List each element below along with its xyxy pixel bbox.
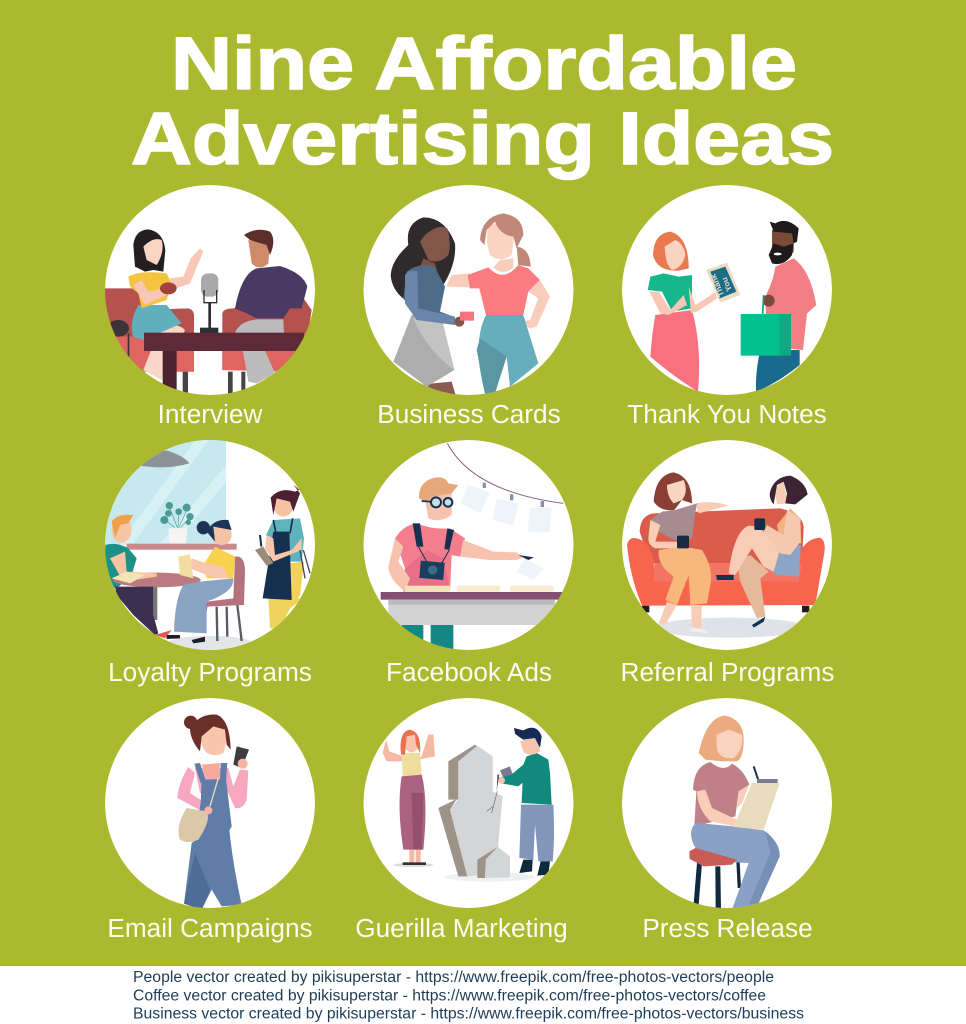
illustration: customer receiving a note and bag [622, 185, 832, 395]
panel: referral programs [621, 440, 834, 687]
credits text: Business vector created by pikisuperstar - https://www.freepik.com/free-photos-vectors/business [133, 1006, 804, 1022]
illustration: cafe with waitress [103, 438, 315, 651]
title: Advertising Ideas [131, 97, 834, 180]
label: Thank You Notes [627, 399, 827, 429]
label: Guerilla Marketing [355, 913, 568, 943]
label: Loyalty Programs [108, 657, 312, 687]
panel: interview [103, 185, 315, 429]
panel: thank you notes [622, 185, 832, 429]
label: Press Release [642, 913, 813, 943]
label: Interview [158, 399, 262, 429]
illustration: customer receiving a note and bag: Thank [708, 272, 726, 298]
credits text [133, 969, 804, 1022]
illustration: sculptor and rock [364, 698, 574, 908]
panel: facebook ads [364, 440, 574, 687]
label: Email Campaigns [107, 913, 313, 943]
label: Business Cards [377, 399, 561, 429]
panel: guerilla marketing [355, 698, 574, 943]
illustration: woman reading her phone [105, 698, 315, 910]
panel: loyalty programs [103, 438, 315, 687]
title: Nine Affordable [171, 22, 797, 105]
panel: press release [622, 698, 832, 943]
illustration: two friends on a sofa [622, 440, 832, 650]
illustration: interview at a table [103, 185, 315, 395]
label: Facebook Ads [386, 657, 552, 687]
illustration: two women exchanging a card [364, 185, 574, 397]
title [131, 22, 834, 180]
illustration: woman writing on a stool [622, 698, 832, 910]
credits text: Coffee vector created by pikisuperstar - https://www.freepik.com/free-photos-vectors/coffee [133, 988, 766, 1004]
illustration: customer receiving a note and bag: You [720, 276, 734, 293]
panel: email campaigns [105, 698, 315, 943]
label: Referral Programs [621, 657, 834, 687]
illustration: photographer with prints [364, 440, 574, 652]
credits text: People vector created by pikisuperstar - https://www.freepik.com/free-photos-vectors/people [133, 969, 774, 986]
panel: business cards [364, 185, 574, 429]
